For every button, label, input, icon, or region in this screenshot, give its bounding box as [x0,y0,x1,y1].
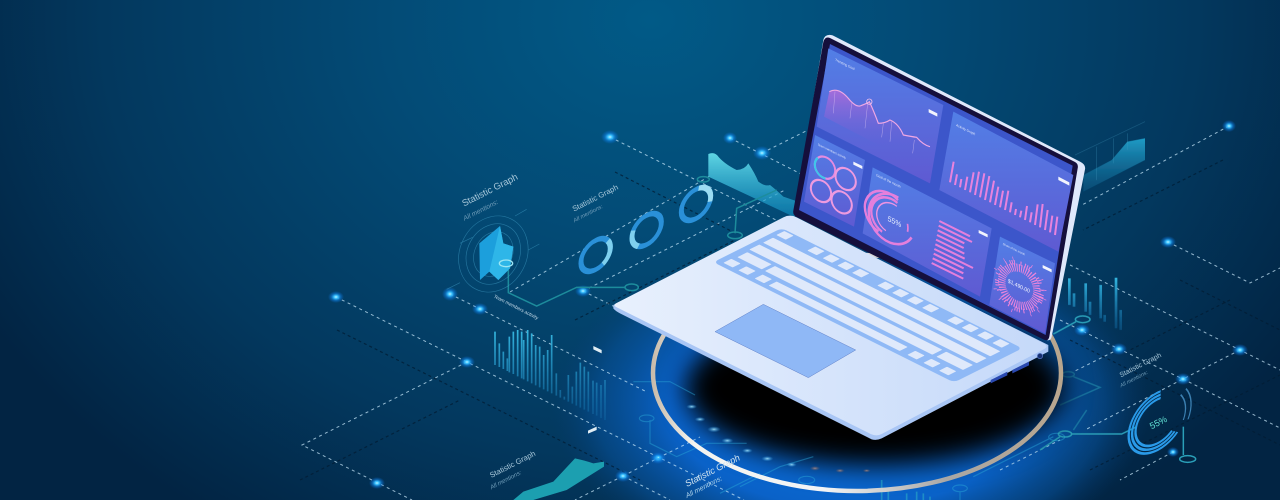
small legend tag 1 [593,346,602,353]
donut chart 1 [581,233,610,277]
panel: line chart [817,48,943,183]
radial burst chart [989,249,1049,324]
radar polygon icon [479,226,513,280]
line chart title: Trending Goal [835,58,855,71]
caption: all mentions 3: All mentions: [489,470,523,492]
panel: ring charts [804,135,865,227]
segmented donut [861,183,917,252]
bars [950,162,1057,235]
line chart area [824,90,930,170]
glowing network nodes [328,120,1248,489]
base top surface [614,216,1047,435]
line chart curve [829,90,930,147]
laptop lid [793,35,1085,340]
bar chart badge [1058,177,1069,186]
circuit traces [633,382,1065,500]
small legend tag 2 [588,427,597,434]
connector ring right [1040,316,1196,462]
port 2 [1012,362,1029,373]
heading: statistic graph 3: Statistic Graph [488,449,537,480]
key row 4 [737,252,973,370]
donut panel badge [979,230,988,237]
heading: statistic graph 1: Statistic Graph [460,172,519,208]
key row 2 [763,238,1000,356]
caption: all mentions 5: All mentions: [684,475,724,500]
grid lines on area chart [1075,122,1145,180]
column chart right [1069,278,1121,330]
circuit connector [508,177,777,306]
key row 5 [723,259,956,375]
heading: statistic graph 2: Statistic Graph [571,183,620,213]
circuit end ring [625,284,638,291]
teal wave area chart [708,153,795,217]
port 1 [991,372,1007,383]
rings [809,153,857,217]
line chart badge [929,109,937,117]
glowing ring on floor [653,255,1061,491]
line chart drop lines [833,92,914,153]
teal area chart [513,458,604,500]
horizontal bars [932,221,973,279]
heading: statistic graph 5: Statistic Graph [683,453,742,489]
trackpad [715,304,856,378]
screen [799,44,1073,335]
key row 1 [776,231,1010,348]
panel: radial burst [989,237,1055,333]
donut chart 3 [681,182,711,226]
blue floor glow [540,230,1280,500]
teal column chart [495,330,605,420]
light spots [654,404,871,473]
caption: team members activity: Team members activity [492,294,540,322]
base side edge [613,216,1048,440]
rings badge [853,162,862,169]
heading: statistic graph 4: Statistic Graph [1119,352,1163,379]
gauge value: 55% [1148,414,1169,431]
donut value: 55% [887,214,902,229]
key row 3 [749,244,987,363]
line chart marker [867,99,872,104]
dark dashed lines [300,160,1280,480]
rings title: Team members activity [817,142,847,160]
caption: all mentions 4: All mentions: [1118,370,1150,390]
group: right floating graphs [1040,122,1196,464]
radial burst value: $1,490.00 [1007,278,1030,295]
dashed network lines [302,126,1280,500]
audio jack [1037,353,1043,359]
laptop base [613,216,1048,440]
laptop shadow on floor [685,310,1065,466]
floor lights and circuit under laptop [633,382,1065,500]
donut chart 2 [632,208,661,252]
group: left upper floating graphs [445,153,795,322]
caption: all mentions 2: All mentions: [572,204,604,225]
bar chart title: Activity Graph [956,123,976,136]
radar target rings [445,204,541,304]
radial burst badge [1043,265,1052,272]
keyboard plate [713,228,1022,382]
lid dark bezel [793,37,1078,340]
panel: bar chart [939,112,1073,252]
radial burst title: Share of the month [1002,242,1026,257]
panel: donut and horizontal bars [861,167,992,297]
donut panel title: Goal of the month [876,173,901,189]
group: lower left floating graphs [488,330,605,500]
lid white frame [794,35,1085,340]
caption: all mentions 1: All mentions: [462,199,500,223]
teal area chart upper right [1083,138,1145,192]
gauge 55 percent [1129,376,1191,464]
